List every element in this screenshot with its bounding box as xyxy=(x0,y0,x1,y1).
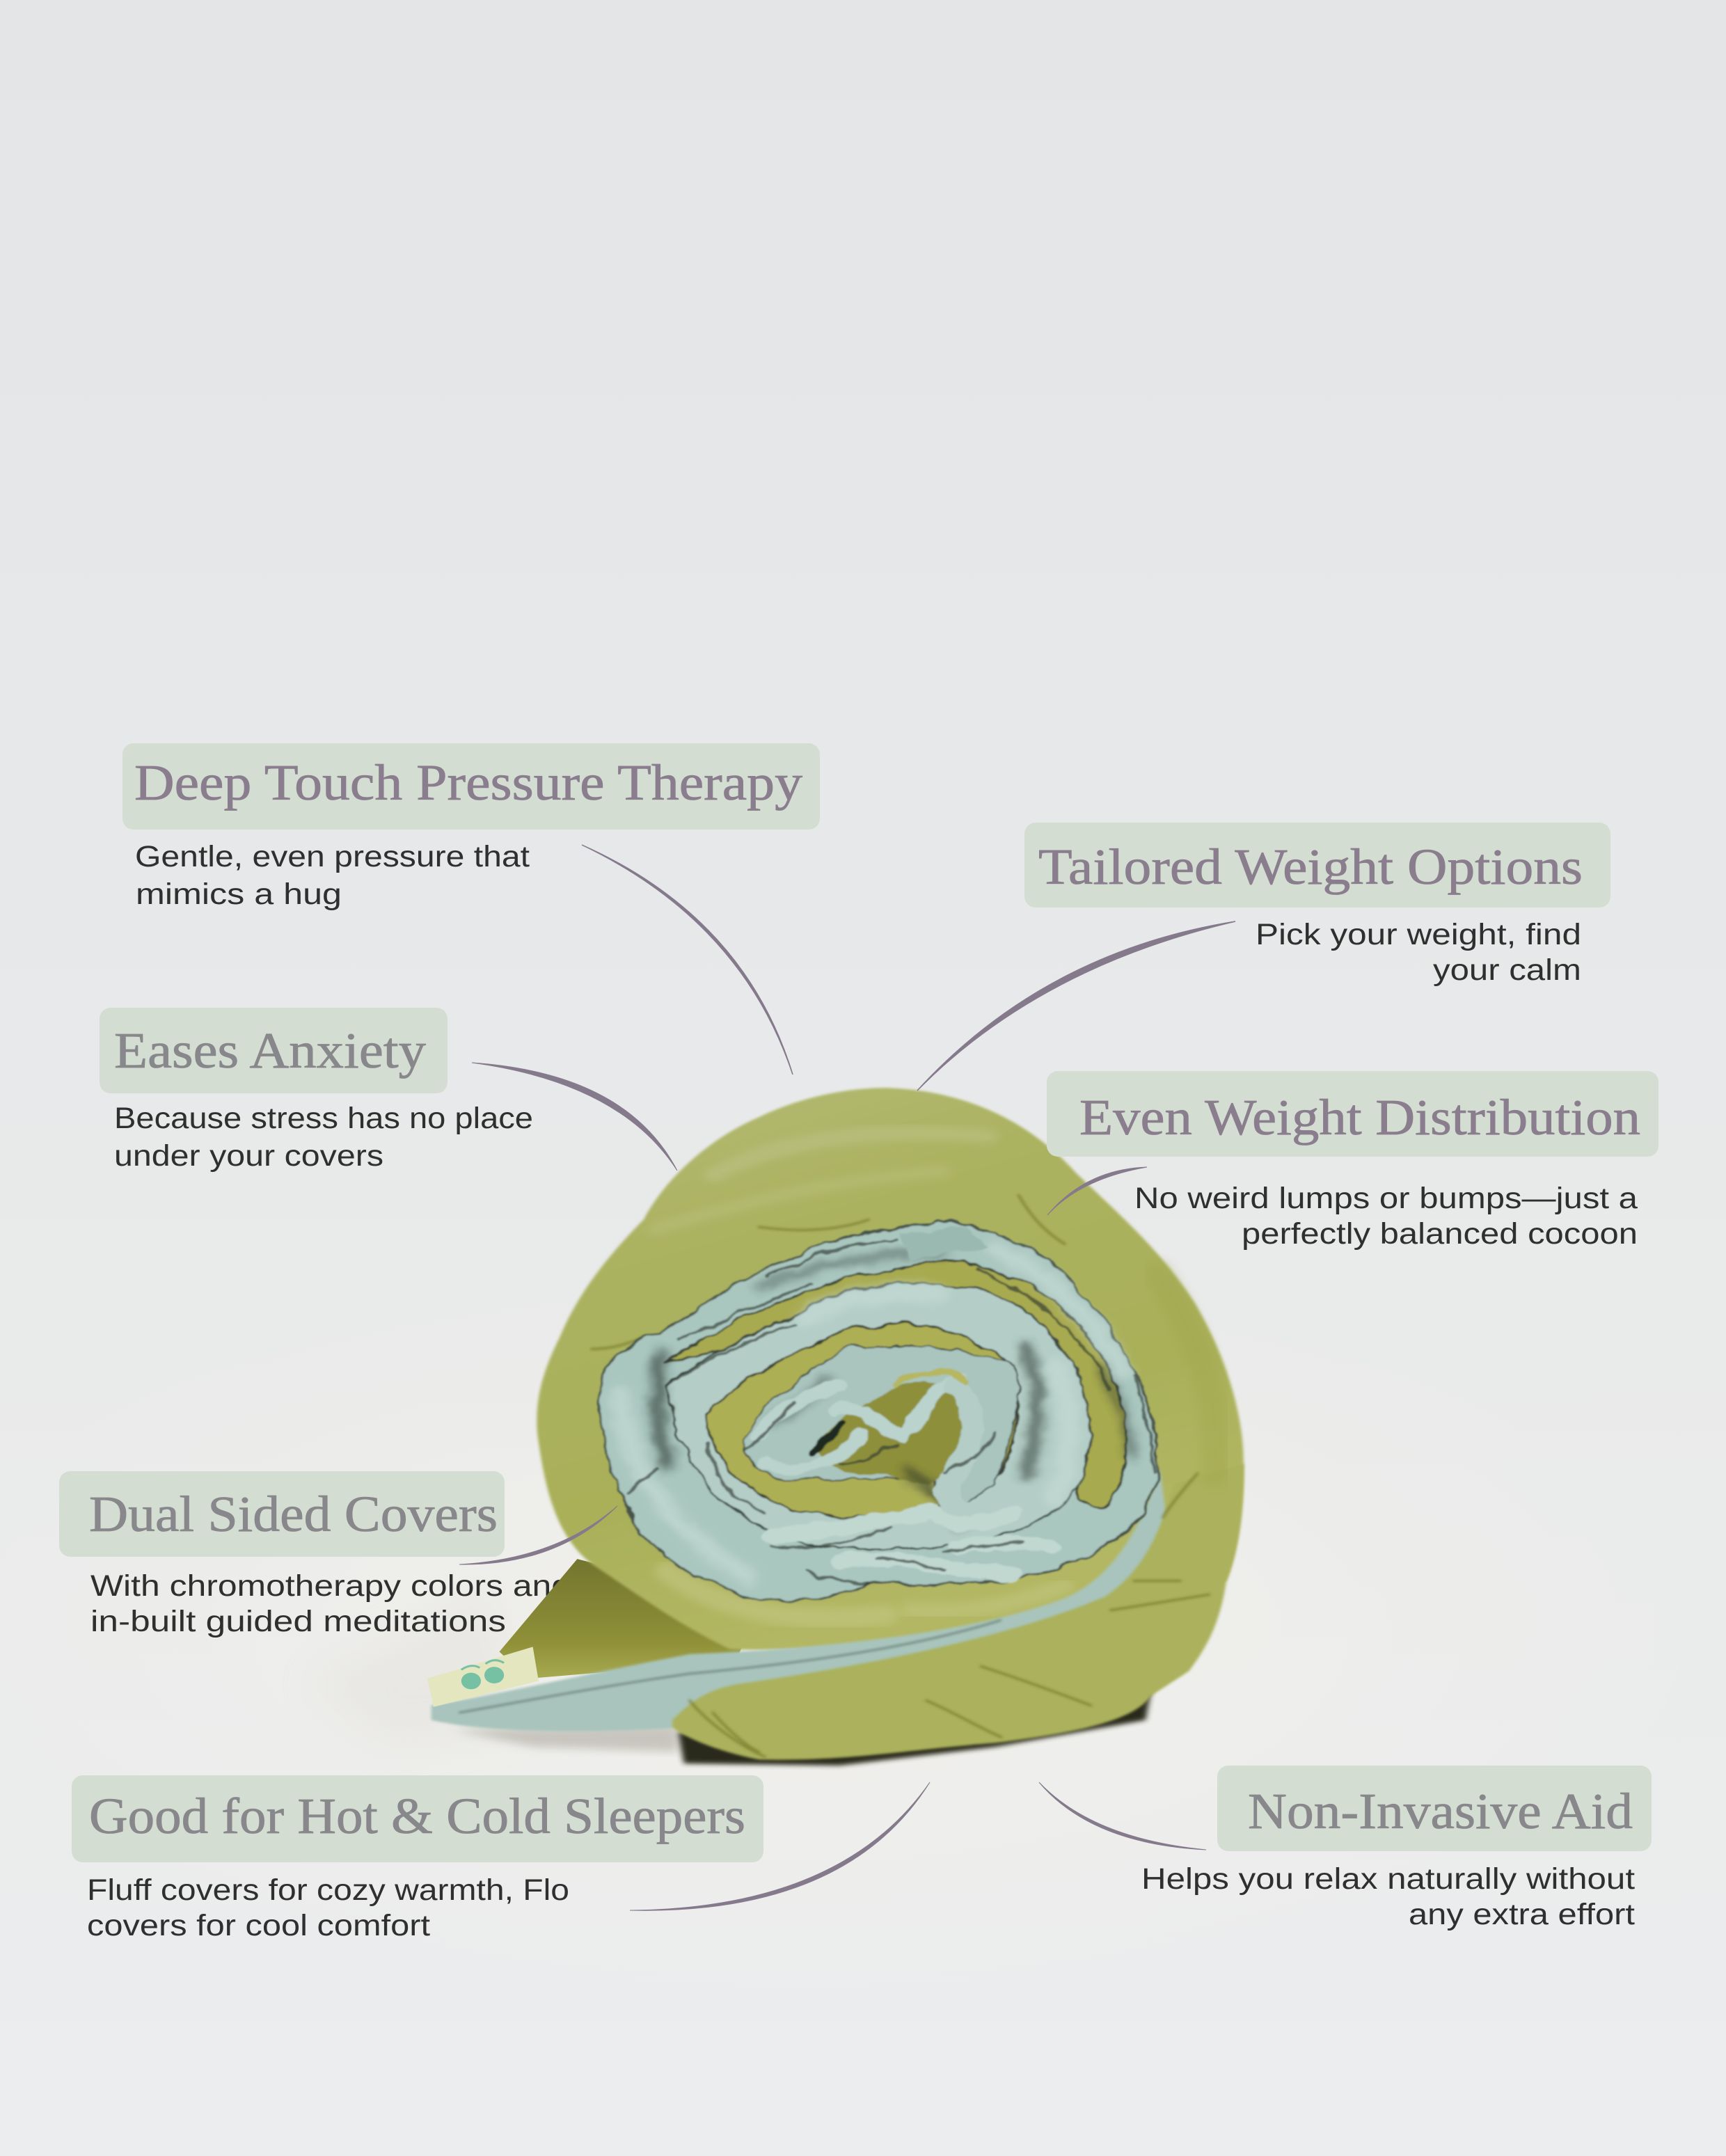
description: Non-Invasive Aid: Helps you relax naturally without xyxy=(1141,1862,1635,1896)
olive wave and dark center xyxy=(898,1372,967,1386)
inner sage layer xyxy=(746,1346,1018,1510)
heading: Tailored Weight Options: Tailored Weight Options xyxy=(1038,839,1583,895)
outer roll xyxy=(537,1088,1244,1650)
description: Non-Invasive Aid: any extra effort xyxy=(1409,1898,1635,1931)
description: Dual Sided Covers: in-built guided meditations xyxy=(90,1605,506,1638)
description: Tailored Weight Options: your calm xyxy=(1433,953,1581,987)
callout: Good for Hot and Cold Sleepers xyxy=(72,1775,763,1942)
outer sage layer xyxy=(597,1221,1157,1601)
heading box: Dual Sided Covers xyxy=(59,1471,505,1557)
callout: Deep Touch Pressure Therapy xyxy=(122,743,820,911)
light highlights on sage rings xyxy=(621,1249,1123,1576)
description: Tailored Weight Options: Pick your weight, find xyxy=(1256,918,1581,951)
soft interior shadows xyxy=(658,1254,1131,1522)
arrow: Non-Invasive Aid xyxy=(1039,1782,1206,1850)
second olive layer xyxy=(707,1325,1018,1517)
arrow: Good for Hot and Cold Sleepers xyxy=(630,1782,930,1910)
heading: Deep Touch Pressure Therapy: Deep Touch Pressure Therapy xyxy=(134,754,803,811)
ground shadow xyxy=(453,1683,1153,1766)
description: Dual Sided Covers: With chromotherapy colors and xyxy=(90,1569,571,1603)
heading box: Eases Anxiety xyxy=(100,1008,448,1093)
arrow: Dual Sided Covers xyxy=(459,1506,617,1564)
folded corner xyxy=(901,1227,990,1261)
callout: Non-Invasive Aid xyxy=(1141,1766,1652,1931)
callout: Dual Sided Covers xyxy=(59,1471,571,1638)
heading box: Good for Hot and Cold Sleepers xyxy=(72,1775,763,1862)
description: Good for Hot and Cold Sleepers: covers for cool comfort xyxy=(87,1909,430,1942)
heading: Even Weight Distribution: Even Weight Distribution xyxy=(1079,1089,1640,1146)
heading box: Deep Touch Pressure Therapy xyxy=(122,743,820,830)
callout: Tailored Weight Options xyxy=(1024,823,1610,987)
heading: Dual Sided Covers: Dual Sided Covers xyxy=(89,1486,498,1542)
lower sage folds xyxy=(770,1512,1053,1574)
lower blanket lobe xyxy=(672,1464,1244,1760)
spiral layers of the roll xyxy=(597,1221,1157,1601)
heading box: Tailored Weight Options xyxy=(1024,823,1610,907)
heading: Good for Hot and Cold Sleepers: Good for Hot & Cold Sleepers xyxy=(89,1788,745,1844)
description: Even Weight Distribution: perfectly balanced cocoon xyxy=(1242,1217,1638,1251)
description: Even Weight Distribution: No weird lumps or bumps—just a xyxy=(1134,1182,1638,1215)
blanket flap, underside xyxy=(500,1559,759,1679)
fabric label tag xyxy=(427,1647,539,1707)
description: Eases Anxiety: under your covers xyxy=(114,1139,383,1173)
callout: Eases Anxiety xyxy=(100,1008,533,1173)
first olive layer xyxy=(667,1261,1127,1507)
second sage layer xyxy=(667,1283,1091,1548)
center olive fold xyxy=(816,1381,977,1486)
highlights and creases on olive fabric xyxy=(592,1133,1216,1757)
heading: Eases Anxiety: Eases Anxiety xyxy=(114,1022,427,1079)
illustration: rolled weighted blanket xyxy=(427,1088,1244,1766)
sage blanket edge xyxy=(432,1468,1166,1731)
dark creases between layers xyxy=(626,1239,1154,1583)
heading: Non-Invasive Aid: Non-Invasive Aid xyxy=(1248,1783,1633,1839)
sage edge fold line xyxy=(459,1620,1001,1713)
arrow: Deep Touch Pressure Therapy xyxy=(582,845,793,1075)
callout: Even Weight Distribution xyxy=(1047,1071,1658,1251)
heading box: Even Weight Distribution xyxy=(1047,1071,1658,1157)
arrow: Eases Anxiety xyxy=(472,1063,677,1171)
center sage folds xyxy=(759,1381,961,1470)
heading box: Non-Invasive Aid xyxy=(1217,1766,1652,1851)
arrow: Tailored Weight Options xyxy=(917,921,1235,1091)
arrow: Even Weight Distribution xyxy=(1047,1167,1147,1215)
description: Good for Hot and Cold Sleepers: Fluff covers for cozy warmth, Flo xyxy=(87,1873,569,1907)
description: Deep Touch Pressure Therapy: mimics a hug xyxy=(136,878,342,911)
description: Eases Anxiety: Because stress has no place xyxy=(114,1102,533,1135)
description: Deep Touch Pressure Therapy: Gentle, even pressure that xyxy=(135,840,530,873)
